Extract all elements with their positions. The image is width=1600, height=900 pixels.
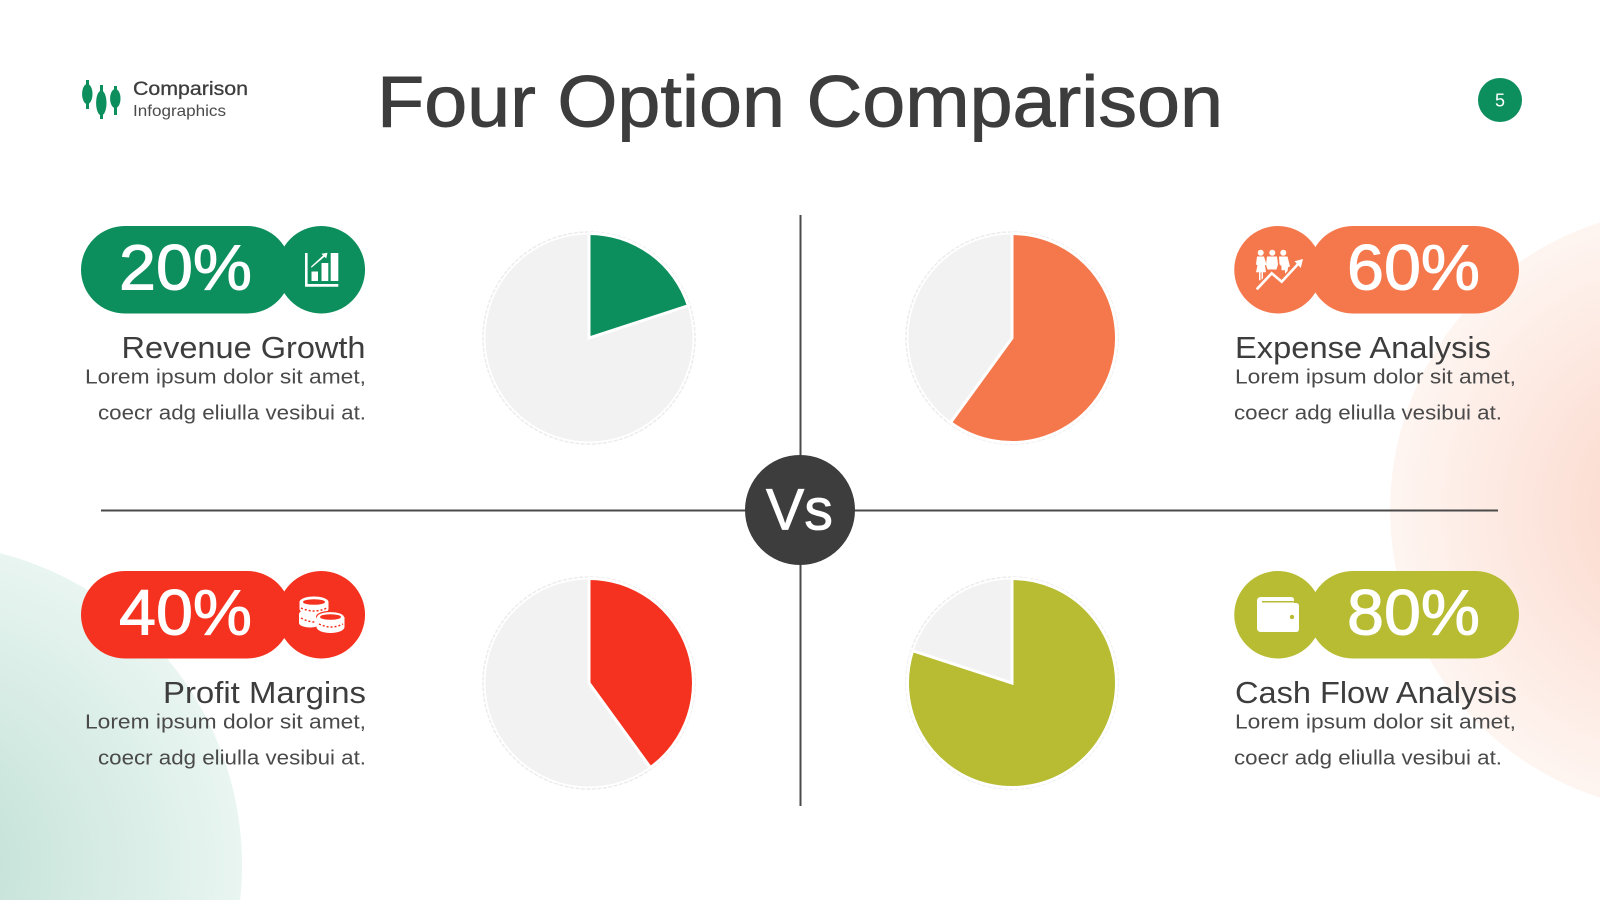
percent pill: 60% bbox=[1347, 232, 1480, 304]
pie chart 60% bbox=[906, 232, 1118, 444]
heading: Cash Flow Analysis bbox=[1235, 675, 1517, 710]
title: Four Option Comparison bbox=[377, 62, 1223, 143]
panel: cash flow analysis bbox=[906, 571, 1519, 789]
background circle: orange bbox=[1390, 222, 1600, 798]
heading: Profit Margins bbox=[163, 675, 366, 710]
body text bbox=[1234, 712, 1516, 770]
pie chart 20% bbox=[483, 232, 695, 444]
background circle: green bbox=[0, 553, 242, 900]
logo text: Infographics: Infographics bbox=[133, 103, 226, 120]
body text: Lorem ipsum dolor sit amet, bbox=[1235, 712, 1516, 734]
body text: coecr adg eliulla vesibui at. bbox=[98, 748, 366, 770]
icon: wallet bbox=[1257, 597, 1299, 632]
panel: revenue growth bbox=[81, 226, 695, 444]
percent pill: 20% bbox=[119, 232, 252, 304]
percent pill bbox=[81, 571, 365, 658]
page number badge bbox=[1478, 78, 1522, 122]
icon: coins bbox=[299, 596, 344, 633]
percent pill bbox=[1234, 571, 1519, 658]
vs badge: Vs bbox=[766, 478, 833, 542]
body text: Lorem ipsum dolor sit amet, bbox=[85, 366, 366, 388]
body text bbox=[85, 366, 366, 424]
icon: team growth bbox=[1256, 250, 1303, 289]
body text: coecr adg eliulla vesibui at. bbox=[1234, 748, 1502, 770]
percent pill bbox=[1234, 226, 1519, 314]
logo text: Comparison: Comparison bbox=[133, 78, 248, 100]
vs badge bbox=[745, 455, 855, 565]
body text: coecr adg eliulla vesibui at. bbox=[98, 402, 366, 424]
percent pill: 80% bbox=[1347, 576, 1480, 648]
body text: coecr adg eliulla vesibui at. bbox=[1234, 402, 1502, 424]
vertical divider bbox=[800, 215, 802, 806]
page number badge: 5 bbox=[1495, 90, 1505, 110]
panel: profit margins bbox=[81, 571, 695, 789]
body text: Lorem ipsum dolor sit amet, bbox=[85, 712, 366, 734]
body text bbox=[1234, 366, 1516, 424]
heading: Revenue Growth bbox=[122, 330, 366, 365]
percent pill bbox=[81, 226, 365, 314]
icon: bar chart bbox=[305, 253, 338, 287]
pie chart 40% bbox=[483, 577, 695, 789]
logo bbox=[82, 78, 248, 120]
icon: candlesticks bbox=[82, 80, 121, 119]
body text: Lorem ipsum dolor sit amet, bbox=[1235, 366, 1516, 388]
heading: Expense Analysis bbox=[1235, 330, 1491, 365]
horizontal divider bbox=[101, 510, 1498, 512]
panel: expense analysis bbox=[906, 226, 1519, 444]
body text bbox=[85, 712, 366, 770]
pie chart 80% bbox=[906, 577, 1118, 789]
percent pill: 40% bbox=[119, 576, 252, 648]
